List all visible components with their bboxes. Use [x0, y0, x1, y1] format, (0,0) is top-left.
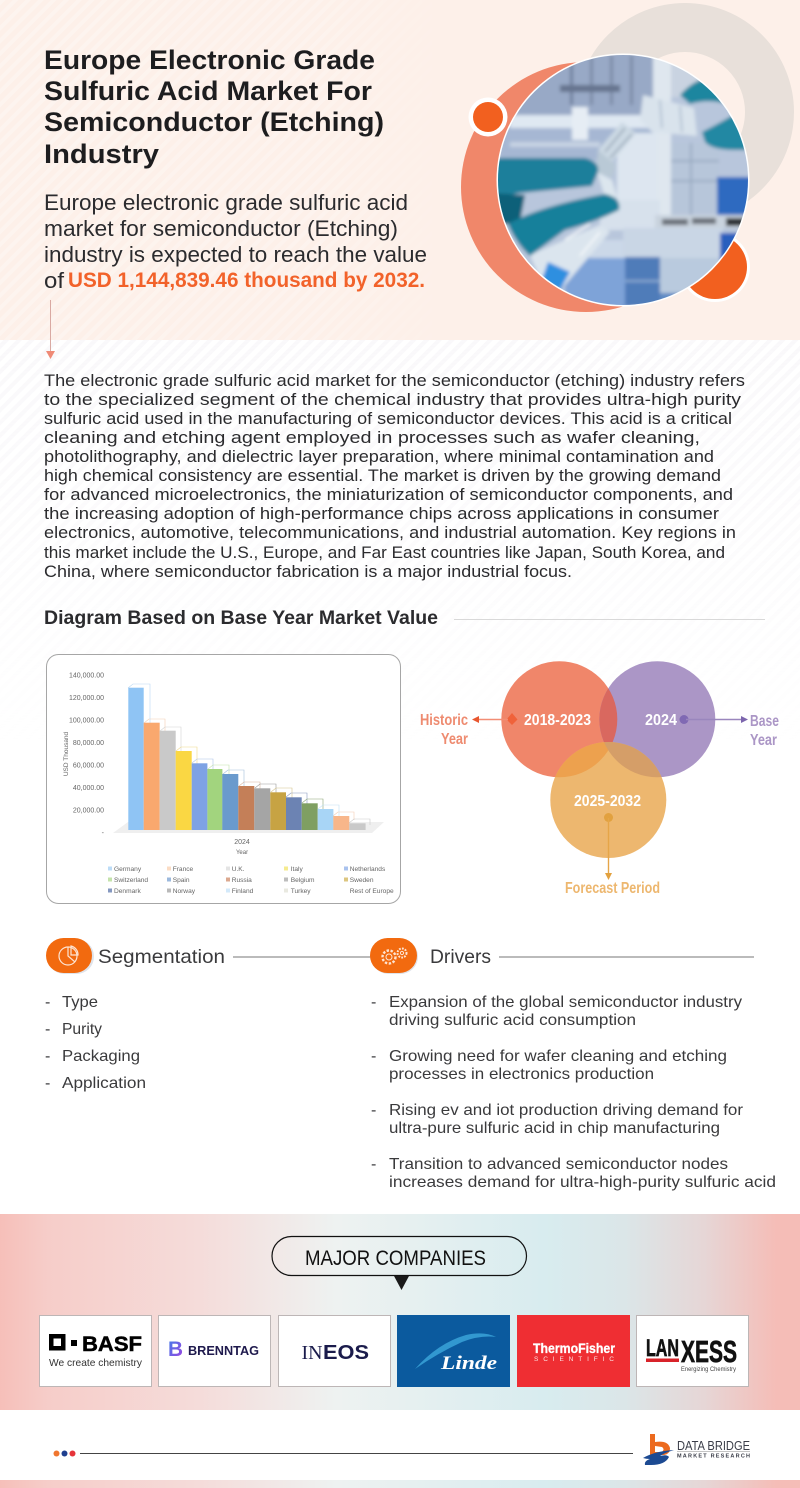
logo: Lanxess	[636, 1316, 748, 1386]
chart axis labels	[69, 672, 105, 837]
description paragraph	[44, 371, 745, 581]
segmentation list	[45, 994, 146, 1092]
legend: Switzerland	[114, 877, 148, 884]
intro text: Europe electronic grade sulfuric acid	[44, 190, 408, 215]
arrow: down from hero	[46, 300, 55, 359]
intro text: market for semiconductor (Etching)	[44, 216, 398, 241]
intro text: of	[44, 268, 65, 293]
logo: Lanxess: LAN	[646, 1335, 679, 1362]
heading: drivers	[370, 938, 754, 974]
legend: France	[173, 866, 194, 873]
legend: Finland	[232, 888, 254, 895]
panel: bar chart	[46, 654, 400, 904]
description paragraph: the increasing adoption of high-performance chips across applications in consumer	[44, 504, 720, 523]
segmentation list: -	[45, 1021, 50, 1038]
chart axis labels: 40,000.00	[73, 785, 104, 792]
logo: Linde: Linde	[440, 1353, 498, 1374]
salmon ring	[461, 62, 711, 312]
segmentation list: -	[45, 994, 50, 1011]
logo: Thermo Fisher	[517, 1315, 630, 1387]
legend: Turkey	[291, 888, 311, 895]
bars	[128, 684, 370, 830]
legend: Rest of Europe	[350, 888, 394, 895]
logo: Data Bridge Market Research: MARKET RESEARCH	[677, 1454, 750, 1460]
segmentation list: Application	[62, 1075, 146, 1092]
drivers list: Transition to advanced semiconductor nodes	[389, 1156, 728, 1173]
legend: Russia	[232, 877, 252, 884]
segmentation list: Packaging	[62, 1048, 140, 1065]
segmentation list: Purity	[62, 1021, 102, 1038]
description paragraph: sulfuric acid used in the manufacturing of semiconductor devices. This acid is a critical	[44, 409, 732, 428]
logo: BASF	[40, 1316, 152, 1386]
logo: Ineos: EOS	[323, 1342, 369, 1364]
legend: Norway	[173, 888, 196, 895]
heading pill	[272, 1236, 526, 1290]
logo: Linde	[397, 1315, 510, 1387]
venn: historic year: 2018-2023	[524, 712, 591, 729]
legend	[108, 866, 394, 895]
description paragraph: China, where semiconductor fabrication is a major industrial focus.	[44, 562, 572, 581]
bottom gradient strip	[0, 1480, 800, 1488]
description paragraph: high chemical consistency are essential. The market is driven by the growing demand	[44, 466, 721, 485]
drivers list: processes in electronics production	[389, 1066, 654, 1083]
description paragraph: The electronic grade sulfuric acid market for the semiconductor (etching) industry refers	[44, 371, 745, 390]
chart axis labels: 120,000.00	[69, 695, 104, 702]
drivers list: Expansion of the global semiconductor industry	[389, 994, 742, 1011]
drivers list: driving sulfuric acid consumption	[389, 1012, 636, 1029]
chart axis labels: 80,000.00	[73, 740, 104, 747]
drivers list: -	[371, 1156, 376, 1173]
icon: gears	[382, 948, 406, 964]
intro text	[44, 190, 427, 293]
icon: pie chart	[59, 946, 78, 965]
drivers list: Rising ev and iot production driving demand for	[389, 1102, 744, 1119]
orange blob	[680, 232, 750, 302]
venn: base year: Year	[750, 732, 777, 749]
beige ring	[600, 28, 770, 196]
legend: Germany	[114, 866, 142, 873]
venn diagram	[420, 661, 779, 897]
venn: historic year: Year	[441, 731, 468, 748]
legend: Netherlands	[350, 866, 386, 873]
logo: Lanxess: Energizing Chemistry	[681, 1366, 737, 1373]
venn: historic year: Historic	[420, 712, 468, 729]
legend: Italy	[291, 866, 303, 873]
venn: base year: Base	[750, 713, 779, 730]
heading: segmentation	[46, 938, 371, 974]
drivers list: increases demand for ultra-high-purity sulfuric acid	[389, 1174, 776, 1191]
page background stripes	[0, 0, 800, 340]
description paragraph: to the specialized segment of the chemical industry that provides ultra-high purity	[44, 390, 742, 409]
chart axis labels: 60,000.00	[73, 762, 104, 770]
title	[44, 45, 384, 169]
description paragraph: for advanced microelectronics, the miniaturization of semiconductor components, and	[44, 485, 733, 504]
chart axis labels: -	[102, 830, 105, 837]
venn: forecast period: Forecast Period	[565, 880, 660, 897]
panel: major companies	[0, 1214, 800, 1410]
logo: Brenntag: BRENNTAG	[188, 1344, 259, 1358]
legend: Belgium	[291, 877, 315, 884]
logo: BASF: We create chemistry	[49, 1357, 143, 1369]
venn: historic year	[420, 712, 591, 748]
logo: Ineos	[278, 1316, 390, 1386]
chart axis labels: 100,000.00	[69, 718, 104, 724]
title: Europe Electronic Grade	[44, 45, 375, 75]
x axis labels: 2024	[234, 839, 250, 846]
legend: Denmark	[114, 888, 141, 895]
legend: Sweden	[350, 877, 374, 884]
segmentation list: -	[45, 1075, 50, 1092]
venn: base year: 2024	[645, 712, 677, 729]
small orange dot	[468, 98, 508, 136]
drivers list: -	[371, 994, 376, 1011]
chart axis labels: 140,000.00	[69, 672, 104, 680]
venn: forecast period: 2025-2032	[574, 793, 641, 810]
drivers list: -	[371, 1048, 376, 1065]
description paragraph: cleaning and etching agent employed in processes such as wafer cleaning,	[44, 428, 700, 447]
venn: base year	[645, 712, 779, 749]
heading: diagram: Diagram Based on Base Year Market Value	[44, 608, 438, 629]
legend: Spain	[173, 877, 190, 884]
segmentation list: Type	[62, 994, 98, 1011]
hero image composition	[461, 28, 770, 312]
logo: Thermo Fisher: ThermoFisher	[533, 1340, 615, 1356]
title: Semiconductor (Etching)	[44, 107, 384, 137]
logo: Thermo Fisher: SCIENTIFIC	[534, 1356, 614, 1363]
description paragraph: photolithography, and dielectric layer preparation, where minimal contamination and	[44, 447, 714, 466]
logo: Ineos: IN	[302, 1342, 322, 1364]
intro text: industry is expected to reach the value	[44, 242, 427, 267]
description paragraph: this market include the U.S., Europe, and Far East countries like Japan, South Korea, and	[44, 543, 725, 562]
legend: U.K.	[232, 866, 245, 873]
photo: lab glass vial held by gloved hands	[496, 54, 750, 306]
logo: Data Bridge Market Research	[643, 1434, 750, 1465]
chart floor	[113, 822, 384, 833]
drivers list: Growing need for wafer cleaning and etching	[389, 1048, 727, 1065]
venn: forecast period	[565, 793, 660, 897]
title: Industry	[44, 139, 159, 169]
heading pill: MAJOR COMPANIES	[305, 1247, 486, 1270]
heading: drivers: Drivers	[430, 946, 491, 968]
segmentation list: -	[45, 1048, 50, 1065]
y axis title: USD Thousand	[63, 731, 70, 776]
title: Sulfuric Acid Market For	[44, 76, 373, 106]
logo: BASF: BASF	[82, 1333, 142, 1356]
logo: Lanxess: XESS	[681, 1334, 737, 1369]
footer line with dots	[54, 1450, 633, 1456]
logo: Data Bridge Market Research: DATA BRIDGE	[677, 1439, 750, 1453]
chart axis labels: 20,000.00	[73, 808, 104, 814]
drivers list: -	[371, 1102, 376, 1119]
drivers list: ultra-pure sulfuric acid in chip manufacturing	[389, 1120, 720, 1137]
panel: bar chart: Year	[236, 850, 248, 856]
drivers list	[371, 994, 776, 1191]
description paragraph: electronics, automotive, telecommunications, and industrial automation. Key regions in	[44, 523, 736, 542]
logo: Brenntag: B	[168, 1338, 183, 1361]
logo: Brenntag	[158, 1316, 270, 1386]
intro text: USD 1,144,839.46 thousand by 2032.	[68, 269, 425, 292]
heading: segmentation: Segmentation	[98, 946, 225, 968]
